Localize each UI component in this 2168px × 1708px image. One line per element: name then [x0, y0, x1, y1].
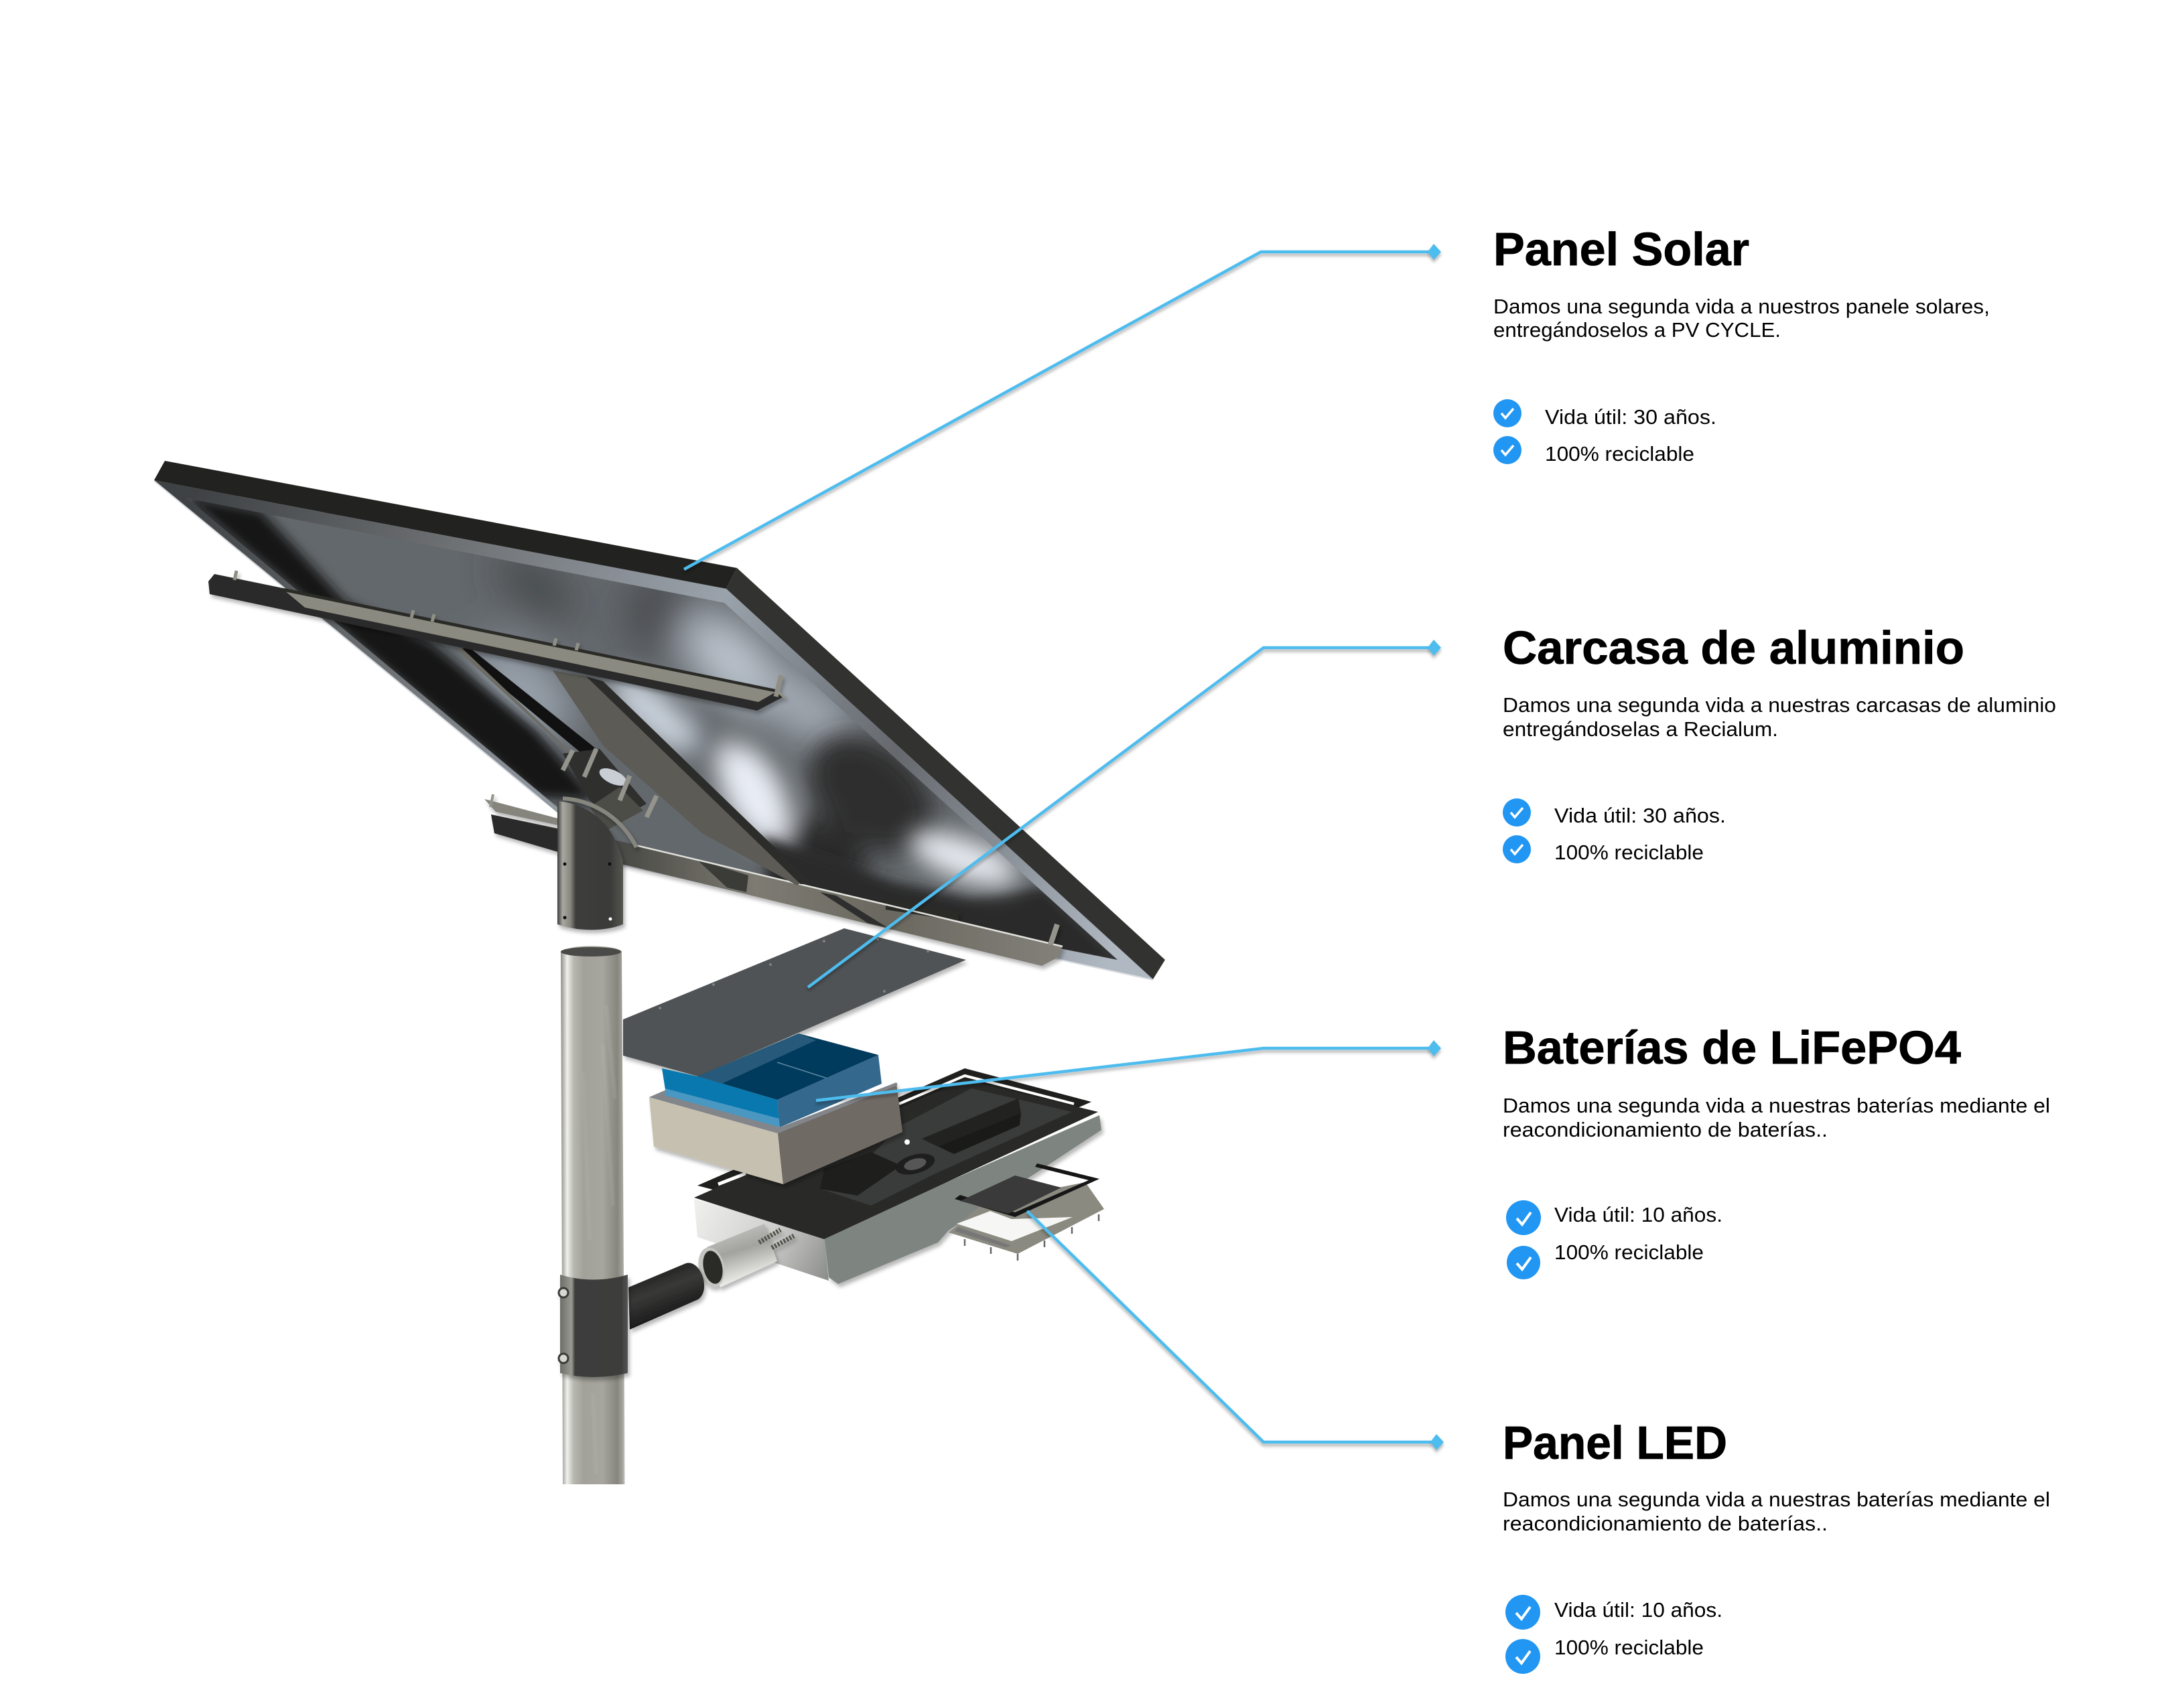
check item: vida util: Vida útil: 10 años. [1554, 1598, 1722, 1622]
callout markers [1428, 244, 1444, 1450]
description: reacondicionamiento de baterías.. [1503, 1512, 1828, 1535]
check item: vida util [1506, 1200, 1722, 1235]
check item: vida util [1503, 798, 1726, 827]
panel frame bevel [154, 480, 1153, 979]
support arm [628, 1263, 704, 1330]
gland seal [893, 1150, 937, 1178]
screws [965, 1214, 1099, 1261]
housing top strip [649, 1082, 898, 1133]
pole top stub [557, 798, 636, 930]
description: entregándoselos a PV CYCLE. [1493, 318, 1781, 342]
check item: reciclable [1493, 436, 1694, 466]
heading: Panel LED [1503, 1417, 1727, 1469]
leader: panel LED [1027, 1211, 1432, 1442]
check item: vida util [1493, 399, 1716, 429]
lamp tube socket [695, 1224, 794, 1289]
housing interior [821, 1088, 1072, 1206]
check item: vida util: Vida útil: 10 años. [1554, 1203, 1722, 1226]
battery housing [649, 1082, 902, 1184]
pole clamp [559, 1275, 628, 1377]
panel top frame edge [154, 461, 737, 589]
solar panel [154, 461, 1165, 980]
check item: reciclable: 100% reciclable [1554, 1636, 1704, 1659]
description [1493, 295, 1990, 342]
description: Damos una segunda vida a nuestras baterías mediante el [1503, 1488, 2050, 1511]
wide diagonal strut [553, 670, 813, 885]
check item: reciclable [1503, 835, 1704, 864]
check item: vida util [1505, 1595, 1722, 1630]
check item: reciclable: 100% reciclable [1545, 442, 1694, 466]
illustration: exploded solar street light [154, 461, 1165, 1484]
main pole [561, 946, 625, 1484]
check item: vida util: Vida útil: 30 años. [1554, 804, 1726, 827]
check item: reciclable [1505, 1636, 1704, 1674]
description [1503, 1094, 2050, 1141]
thin left strut [456, 648, 606, 757]
panel right frame edge [726, 568, 1165, 979]
section: Panel LED [1503, 1417, 2050, 1674]
description: Damos una segunda vida a nuestros panele solares, [1493, 295, 1990, 318]
heading: Baterías de LiFePO4 [1503, 1021, 1961, 1074]
description: entregándoselas a Recialum. [1503, 717, 1778, 741]
section: Panel Solar [1493, 223, 1990, 466]
check item: reciclable: 100% reciclable [1554, 1240, 1704, 1264]
battery cell front [662, 1068, 779, 1120]
housing silver end [694, 1199, 829, 1281]
leader: carcasa de aluminio [808, 648, 1430, 987]
upper gasket frame [697, 1068, 1091, 1219]
LED glass [960, 1176, 1061, 1214]
battery pack [649, 1034, 902, 1184]
LED module [949, 1163, 1104, 1261]
description [1503, 693, 2056, 741]
description [1503, 1488, 2050, 1535]
check item: reciclable [1507, 1240, 1704, 1279]
panel lower highlight [154, 481, 541, 799]
leader lines [684, 252, 1432, 1442]
battery cell side [777, 1055, 882, 1127]
LED board [957, 1211, 1073, 1241]
check item: reciclable: 100% reciclable [1554, 841, 1704, 864]
section: Carcasa de aluminio [1503, 622, 2056, 864]
leader: panel solar [684, 252, 1430, 569]
battery cell top [697, 1034, 878, 1100]
leader: baterias [816, 1048, 1430, 1100]
gasket slots [899, 1076, 1074, 1104]
description: Damos una segunda vida a nuestras carcasas de aluminio [1503, 693, 2056, 717]
panel back surface with reflections [174, 489, 1132, 971]
check item: vida util: Vida útil: 30 años. [1545, 405, 1716, 429]
upper mounting rail [208, 571, 785, 711]
central mounting bracket [563, 749, 657, 831]
LED base [949, 1182, 1104, 1254]
aluminium cover plate [623, 928, 966, 1076]
LED gasket [955, 1163, 1099, 1217]
description: reacondicionamiento de baterías.. [1503, 1118, 1828, 1141]
lamp housing [694, 1068, 1101, 1284]
description: Damos una segunda vida a nuestras baterías mediante el [1503, 1094, 2050, 1117]
heading: Carcasa de aluminio [1503, 622, 1964, 674]
section: Baterias de LiFePO4 [1503, 1021, 2050, 1279]
housing top surface [694, 1080, 1098, 1239]
heading: Panel Solar [1493, 223, 1749, 275]
housing front face [824, 1115, 1101, 1284]
lower mounting rail [484, 794, 1063, 966]
